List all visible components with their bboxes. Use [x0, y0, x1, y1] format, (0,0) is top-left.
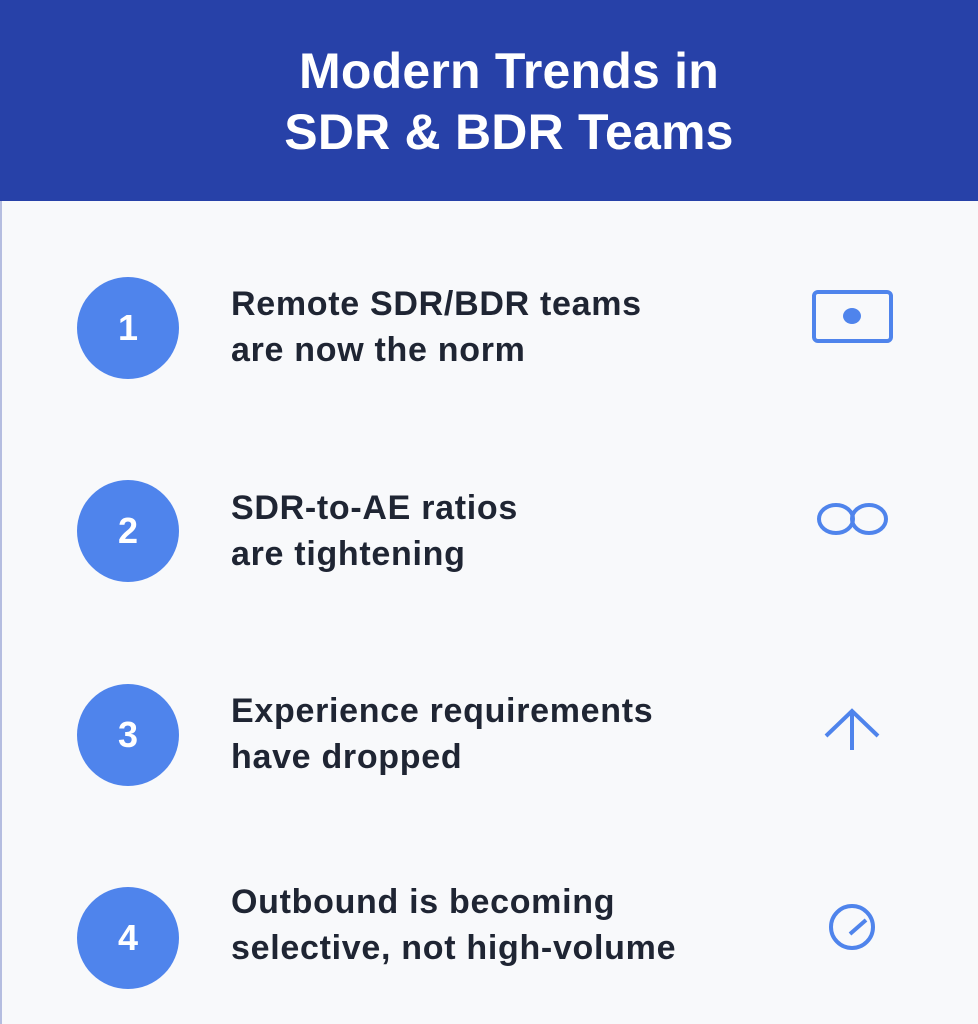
- item 2 text: SDR-to-AE ratios: [231, 489, 518, 527]
- item 4 text: [231, 883, 676, 967]
- item 3 text: [231, 692, 653, 776]
- item 1 text: Remote SDR/BDR teams: [231, 285, 642, 323]
- item 4 number: [77, 887, 179, 989]
- item 2 text: are tightening: [231, 535, 466, 573]
- title: Modern Trends in: [299, 43, 719, 99]
- icon: gauge: [831, 906, 873, 948]
- item 2 text: [231, 489, 518, 573]
- title: SDR & BDR Teams: [284, 104, 734, 160]
- icon: infinity circles: [819, 505, 886, 533]
- item 1 text: [231, 285, 642, 369]
- icon: up arrow: [826, 711, 878, 750]
- item 3 number: [77, 684, 179, 786]
- item 4 text: Outbound is becoming: [231, 883, 615, 921]
- item 1 text: are now the norm: [231, 331, 526, 369]
- item 3 text: Experience requirements: [231, 692, 653, 730]
- title: [0, 0, 978, 201]
- item 3 number: 3: [118, 714, 138, 755]
- item 4 text: selective, not high-volume: [231, 929, 676, 967]
- item 3 text: have dropped: [231, 738, 462, 776]
- icon: screen: [814, 292, 891, 341]
- item 1 number: 1: [118, 307, 138, 348]
- item 4 number: 4: [118, 917, 138, 958]
- item 2 number: 2: [118, 510, 138, 551]
- item 1 number: [77, 277, 179, 379]
- item 2 number: [77, 480, 179, 582]
